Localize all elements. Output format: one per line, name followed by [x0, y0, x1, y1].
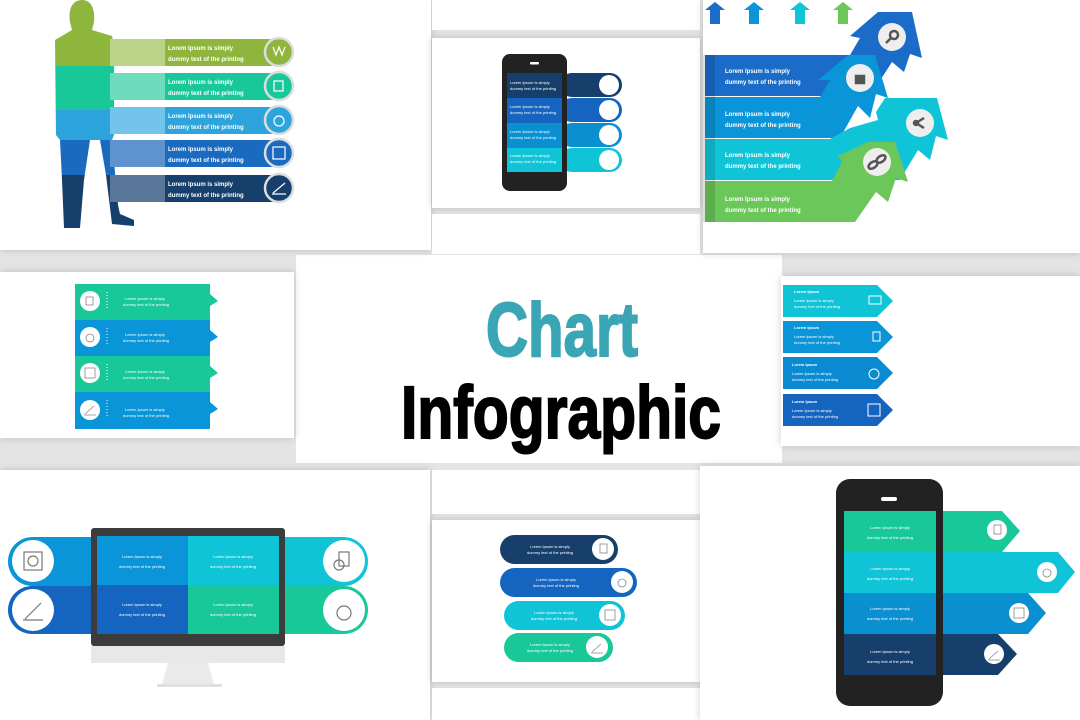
panel: small phone: dummy text of the printing [510, 86, 556, 91]
bar rows [110, 38, 293, 202]
panel: arrows up: Lorem Ipsum is simply [725, 69, 791, 75]
bar rows: dummy text of the printing [168, 91, 244, 97]
panel: small phone: Lorem Ipsum is simply [510, 104, 550, 109]
panel: pills list: Lorem Ipsum is simply [530, 544, 570, 549]
panel: right pointer list: Lorem Ipsum [792, 399, 818, 404]
panel: pills list: Lorem Ipsum is simply [534, 610, 574, 615]
panel: monitor: Lorem Ipsum is simply [122, 554, 162, 559]
panel: right pointer list: Lorem Ipsum [794, 289, 820, 294]
bar rows: dummy text of the printing [168, 57, 244, 63]
panel: monitor: Lorem Ipsum is simply [213, 554, 253, 559]
panel: small phone [432, 0, 700, 254]
panel: arrows up: dummy text of the printing [725, 208, 801, 214]
phone body [502, 54, 567, 191]
panel: right pointer list: Lorem Ipsum [794, 325, 820, 330]
panel: big phone: Lorem Ipsum is simply [870, 649, 910, 654]
panel: stacked notched rows: Lorem Ipsum is simply [125, 407, 165, 412]
panel: monitor: dummy text of the printing [210, 564, 256, 569]
panel: stacked notched rows [0, 272, 294, 438]
panel: small phone: Lorem Ipsum is simply [510, 80, 550, 85]
bar rows: Lorem Ipsum is simply [168, 114, 234, 120]
panel: pills list: dummy text of the printing [527, 550, 573, 555]
icons [846, 23, 934, 176]
panel: right pointer list: dummy text of the printing [794, 304, 840, 309]
panel: small phone: dummy text of the printing [510, 135, 556, 140]
bar rows: Lorem Ipsum is simply [168, 46, 234, 52]
bar rows: Lorem Ipsum is simply [168, 147, 234, 153]
panel: stacked notched rows: dummy text of the printing [123, 302, 169, 307]
title: Chart [486, 288, 638, 373]
panel: big phone: dummy text of the printing [867, 535, 913, 540]
panel: right pointer list: Lorem Ipsum is simply [794, 334, 834, 339]
panel: pills list: dummy text of the printing [531, 616, 577, 621]
panel: right pointer list: dummy text of the printing [792, 377, 838, 382]
tabs [560, 73, 622, 172]
panel: monitor: Lorem Ipsum is simply [213, 602, 253, 607]
panel: small phone: Lorem Ipsum is simply [510, 129, 550, 134]
panel: pills list: dummy text of the printing [527, 648, 573, 653]
panel: small phone: Lorem Ipsum is simply [510, 153, 550, 158]
title: Infographic [401, 371, 721, 454]
panel: stacked notched rows: dummy text of the printing [123, 413, 169, 418]
panel: big phone: dummy text of the printing [867, 616, 913, 621]
panel: arrows up [703, 0, 1080, 253]
panel: right pointer list: Lorem Ipsum is simply [792, 408, 832, 413]
panel: small phone: dummy text of the printing [510, 110, 556, 115]
panel: arrows up: dummy text of the printing [725, 123, 801, 129]
bar rows: dummy text of the printing [168, 193, 244, 199]
panel: small phone: dummy text of the printing [510, 159, 556, 164]
panel: big phone: Lorem Ipsum is simply [870, 525, 910, 530]
panel: arrows up: dummy text of the printing [725, 80, 801, 86]
bar rows: Lorem Ipsum is simply [168, 80, 234, 86]
panel: stacked notched rows: Lorem Ipsum is simply [125, 296, 165, 301]
panel: arrows up: dummy text of the printing [725, 164, 801, 170]
panel: monitor: dummy text of the printing [210, 612, 256, 617]
panel: pills list: dummy text of the printing [533, 583, 579, 588]
panel: big phone: dummy text of the printing [867, 576, 913, 581]
panel: monitor: dummy text of the printing [119, 612, 165, 617]
panel: arrows up: Lorem Ipsum is simply [725, 153, 791, 159]
panel: pills list: Lorem Ipsum is simply [536, 577, 576, 582]
monitor body [91, 528, 285, 646]
panel: big phone [700, 466, 1080, 720]
background center [296, 255, 782, 463]
panel: person bars [0, 0, 431, 250]
panel: right pointer list: dummy text of the printing [792, 414, 838, 419]
panel: stacked notched rows: dummy text of the printing [123, 375, 169, 380]
panel: right pointer list: Lorem Ipsum [792, 362, 818, 367]
ribbons [703, 12, 948, 222]
panel: monitor: dummy text of the printing [119, 564, 165, 569]
panel: right pointer list [781, 276, 1080, 446]
bar rows: dummy text of the printing [168, 158, 244, 164]
man silhouette [55, 0, 134, 228]
panel: big phone: Lorem Ipsum is simply [870, 566, 910, 571]
arrows [930, 511, 1075, 675]
side pills [8, 537, 368, 634]
panel: right pointer list: Lorem Ipsum is simply [792, 371, 832, 376]
panel: big phone: dummy text of the printing [867, 659, 913, 664]
title [401, 288, 721, 454]
panel: stacked notched rows: dummy text of the printing [123, 338, 169, 343]
bar rows: Lorem Ipsum is simply [168, 182, 234, 188]
panel: right pointer list: Lorem Ipsum is simply [794, 298, 834, 303]
panel: arrows up: Lorem Ipsum is simply [725, 197, 791, 203]
bar rows: dummy text of the printing [168, 125, 244, 131]
panel: monitor [0, 470, 430, 720]
panel: pills list: Lorem Ipsum is simply [530, 642, 570, 647]
panel: big phone: Lorem Ipsum is simply [870, 606, 910, 611]
panel: arrows up: Lorem Ipsum is simply [725, 112, 791, 118]
panel: stacked notched rows: Lorem Ipsum is simply [125, 369, 165, 374]
panel: monitor: Lorem Ipsum is simply [122, 602, 162, 607]
panel: stacked notched rows: Lorem Ipsum is simply [125, 332, 165, 337]
small arrows [705, 2, 853, 24]
panel: pills list [432, 470, 700, 720]
panel: right pointer list: dummy text of the printing [794, 340, 840, 345]
